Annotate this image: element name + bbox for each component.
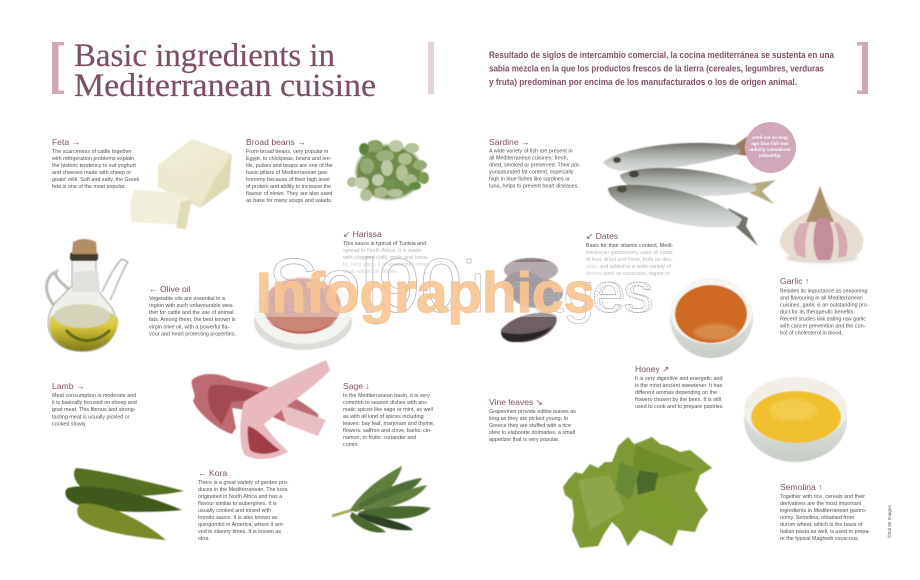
credit: ©Sol 90 Images — [886, 505, 892, 538]
heading: broad beans: Broad beans → — [246, 137, 306, 147]
title: Basic ingredients in — [74, 38, 335, 74]
text: olive oil: Vegetable oils are essential in a — [149, 296, 225, 302]
text: kora: flavour similar to aubergines. It is — [198, 501, 277, 507]
title block — [52, 38, 376, 104]
heading: semolina: Semolina ↑ — [780, 482, 823, 492]
text: broad beans: Egypt, to chickpeas, beans and len- — [246, 156, 332, 162]
text: lamb: it is basically focused on sheep and — [52, 400, 137, 406]
text: sage: leaves: bay leaf, marjoram and thyme, — [343, 421, 435, 427]
image: sardines — [603, 136, 776, 246]
text: kora: ved in slavery times. It is known as — [198, 529, 281, 535]
text: feta: and cheeses made with sheep or — [52, 170, 131, 176]
text: sage: flowers: saffron and clove, barks: cin- — [343, 428, 432, 434]
text: semolina: ingredients in Mediterranean gastro- — [780, 508, 867, 514]
text: sage: cumin. — [343, 442, 359, 448]
text: feta: with refrigeration problems explain — [51, 156, 134, 162]
text: broad beans: of protein and ability to increase the — [246, 184, 331, 190]
text: garlic: and flavouring in all Mediterranean — [780, 296, 863, 302]
text: semolina: durum wheat, which is the basis of — [780, 522, 863, 528]
watermark outline: Sol90 — [268, 244, 462, 329]
text: sage: matic spices like sage or mint, as well — [343, 407, 433, 413]
image: garlic — [780, 186, 863, 263]
text: lamb: tasting meat is usually pickled or — [52, 414, 130, 420]
text: semolina: Italian pasta as well, is used to prepa- — [780, 529, 870, 535]
text: sardine: dried, smoked or preserved. Their pol- — [489, 162, 580, 168]
panel: kora — [198, 468, 289, 542]
text: honey: flowers chosen by the bees. It is still — [635, 397, 721, 403]
text: dates faded: serts and added to a wide variety of — [586, 264, 672, 270]
image: olive oil jar — [47, 239, 128, 351]
text: lamb: cooked slowly. — [52, 422, 87, 428]
text: vine leaves: stew to elaborate dolmades, a small — [489, 430, 575, 436]
watermark suffix: es — [592, 261, 651, 324]
text: feta: goats' milk. Soft and salty, the Greek — [52, 177, 140, 183]
heading: garlic: Garlic ↑ — [780, 276, 809, 286]
panel: olive oil — [149, 284, 236, 338]
text: olive oil: fats. Among them, the best known is — [149, 317, 236, 323]
text: kora: There is a great variety of garden pro- — [198, 480, 289, 486]
text: harissa: This sauce is typical of Tunisia and — [343, 241, 426, 247]
callout: blue fish: ago blue fish was — [751, 141, 789, 146]
text: garlic: cuisines, garlic is an outstanding pro- — [780, 302, 869, 308]
text: honey: used to cook and to prepare pastries. — [635, 404, 724, 410]
text: semolina: derivatives are the most important — [780, 501, 862, 507]
text: harissa faded: cous and some dishes. — [343, 269, 398, 275]
text: harissa faded: to. Very spicy, it is served with cous- — [343, 262, 429, 268]
panel: broad beans — [246, 137, 333, 204]
text: broad beans: basic pillars of Mediterranean gas- — [246, 170, 329, 176]
fish 3 — [608, 185, 758, 246]
text: dates faded: dishes such as couscous, tagine or — [586, 271, 670, 277]
text: sage: common to season dishes with aro- — [343, 400, 428, 406]
text: semolina: re the typical Maghreb couscous. — [780, 536, 859, 542]
heading: harissa: ↙ Harissa — [343, 229, 382, 239]
text: honey: It is very digestive and energetic and — [635, 376, 722, 382]
image: semolina bowl — [744, 377, 847, 462]
image: lamb chops — [192, 360, 330, 459]
text: semolina: Together with rice, cereals and their — [780, 494, 865, 500]
image: broad beans — [347, 140, 429, 201]
text: sardine: A wide variety of fish are present in — [489, 148, 573, 154]
panel: feta — [51, 137, 140, 190]
heading: vine leaves: Vine leaves ↘ — [489, 397, 543, 407]
text: honey: is the most ancient sweetener. It has — [635, 383, 722, 389]
callout: blue fish: Until not so long — [752, 135, 788, 140]
text: kora: usually cooked and mixed with — [198, 508, 271, 514]
text: kora: tomato sauce. It is also known as — [198, 515, 278, 521]
text: harissa faded: with chopped chilli, garlic and toma- — [342, 255, 429, 261]
text: vine leaves: Grapevines provide edible leaves as — [489, 409, 576, 415]
fish 1 — [603, 136, 748, 171]
panel: lamb — [52, 381, 137, 428]
text: broad beans: as base for many soups and salads. — [246, 198, 332, 204]
panel: dates — [586, 231, 673, 277]
text: sage: namon, or fruits: coriander and — [343, 435, 416, 441]
heading: sage: Sage ↓ — [343, 381, 370, 391]
panel: honey — [635, 364, 724, 410]
text: sardine: yunsaturated fat content, especially — [489, 170, 574, 176]
image: sage leaves — [332, 466, 431, 533]
text: kora: originated in North Africa and has a — [198, 494, 282, 500]
text: kora: duces in the Mediterranean. The kora — [198, 487, 288, 493]
text: dates faded: terranean gastronomy uses all kinds — [586, 250, 673, 256]
text: broad beans: tronomy because of their high level — [246, 177, 330, 183]
panel: semolina — [780, 482, 870, 542]
text: kora: okra. — [198, 536, 210, 542]
text: broad beans: flavour of stews. They are also used — [246, 191, 332, 197]
heading: olive oil: ← Olive oil — [149, 284, 191, 294]
text: vine leaves: long as they are picked young. In — [489, 416, 568, 422]
text: dates: Basic for their vitamin content, Medi- — [586, 243, 673, 249]
watermark main: Infographics — [256, 261, 595, 324]
text: kora: quingombó in America, where it arri- — [198, 522, 284, 528]
callout: blue fish: unfairly considered — [749, 147, 791, 152]
watermark outline right: Images — [470, 261, 654, 324]
intro text: Resultado de siglos de intercambio comercial, la cocina mediterránea se sustenta en una — [489, 50, 835, 60]
text: sardine: all Mediterranean cuisines: fresh, — [489, 156, 569, 162]
text: honey: different aromas depending on the — [635, 390, 717, 396]
heading: kora: ← Kora — [198, 468, 227, 478]
intro text: y fruta) predominan por encima de los manufacturados o los de origen animal. — [489, 77, 797, 87]
text: feta: the historic tendency to eat yoghurt — [52, 163, 136, 169]
heading: lamb: Lamb → — [52, 381, 84, 391]
text: sardine: tuna, helps to prevent heart diseases. — [489, 184, 579, 190]
left bracket — [52, 42, 64, 94]
text: garlic: Recent studies link eating raw garlic — [780, 316, 866, 322]
image: vine leaves — [563, 437, 712, 548]
watermark small square — [467, 259, 471, 263]
panel: harissa — [342, 229, 429, 275]
text: feta: feta is one of the most popular. — [52, 184, 126, 190]
text: vine leaves: appetizer that is very popular. — [489, 437, 559, 443]
heading: honey: Honey ↗ — [635, 364, 669, 374]
text: garlic: trol of cholesterol in blood. — [780, 330, 843, 336]
text: lamb: Meat consumption is moderate and — [52, 393, 136, 399]
text: olive oil: ther for cattle and the use of animal — [149, 310, 234, 316]
panel: sage — [343, 381, 435, 448]
watermark — [255, 244, 654, 329]
image: dates — [501, 258, 563, 342]
right bracket — [857, 42, 868, 94]
text: olive oil: virgin olive oil, with a powerful fla- — [149, 324, 229, 330]
text: harissa faded: spread to North Africa. It is made — [343, 248, 422, 254]
title: Mediterranean cuisine — [74, 68, 376, 104]
text: feta: The scarceness of cattle together — [52, 149, 132, 155]
panel: sardine — [489, 137, 580, 190]
panel: garlic — [779, 276, 869, 336]
text: lamb: goat meat. This fibrous and strong- — [52, 407, 136, 413]
heading: dates: ↙ Dates — [586, 231, 618, 241]
panel: vine leaves — [489, 397, 576, 443]
text: garlic: Besides its importance as seasoning — [780, 288, 868, 294]
text: garlic: duct for its therapeutic benefits. — [780, 310, 855, 316]
heading: feta: Feta → — [52, 137, 80, 147]
callout: blue fish — [745, 122, 796, 173]
text: vine leaves: Greece they are stuffed with a rice — [489, 423, 571, 429]
text: sage: as with all kind of spices including — [343, 414, 424, 420]
image: okra — [65, 468, 184, 540]
text: dates faded: of fruit, dried and fresh, both as des- — [586, 257, 673, 263]
text: sage: In the Mediterranean basin, it is very — [343, 393, 430, 399]
text: garlic: with cancer prevention and the con- — [779, 324, 866, 330]
text: sardine: high in blue fishes like sardines or — [489, 176, 570, 182]
text: olive oil: region with such unfavourable wea- — [149, 303, 234, 309]
centre divider — [428, 42, 434, 94]
text: semolina: nomy. Semolina, obtained from — [780, 515, 855, 521]
fish 2 — [620, 168, 776, 204]
image: feta cheese — [130, 139, 232, 229]
callout: blue fish: unhealthy. — [759, 153, 781, 158]
image: harissa bowl — [254, 276, 352, 350]
text: olive oil: vour and heart protecting properties. — [149, 332, 236, 338]
intro text: sabia mezcla en la que los productos frescos de la tierra (cereales, legumbres, verduras — [489, 64, 824, 74]
text: broad beans: From broad beans, very popular in — [246, 149, 328, 155]
image: honey bowl — [670, 278, 753, 358]
heading: sardine: Sardine → — [489, 137, 530, 147]
text: broad beans: tils, pulses and beans are one of the — [246, 163, 333, 169]
